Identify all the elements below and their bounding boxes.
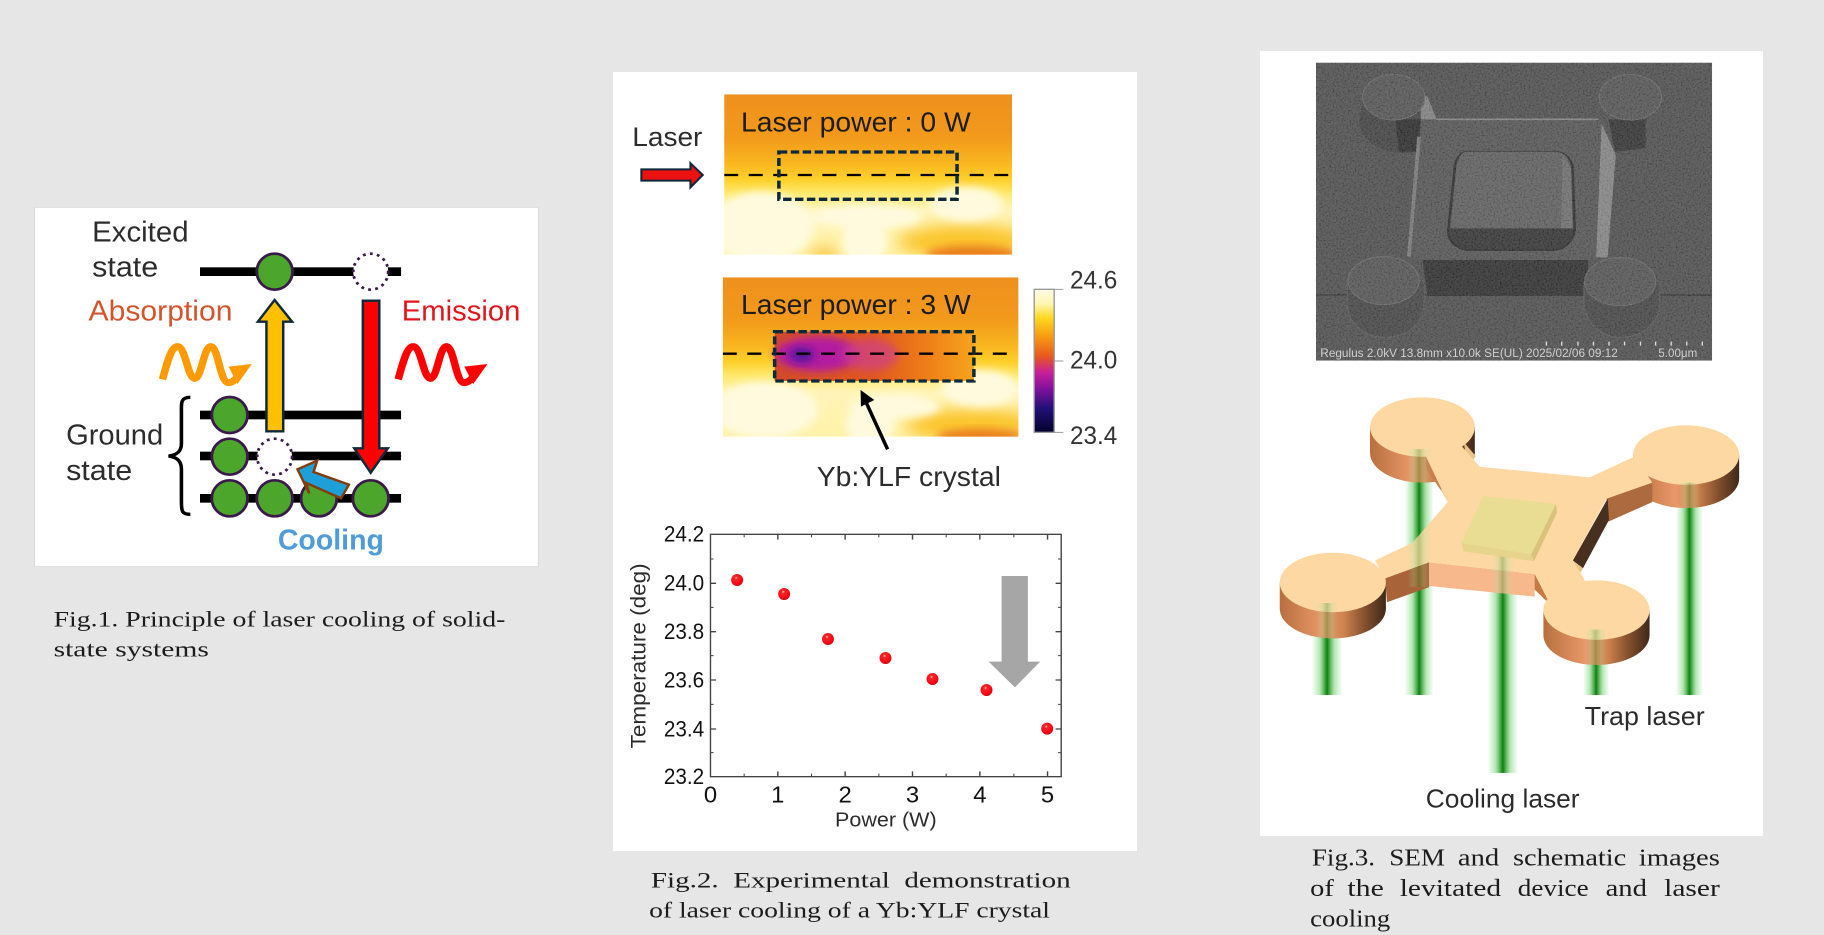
y axis tick labels: 24.2 — [664, 522, 704, 547]
Fig.3 caption: the — [1347, 876, 1384, 902]
emitted photon wave — [398, 347, 487, 384]
central block — [1448, 152, 1575, 250]
frame underside — [1422, 260, 1588, 296]
Fig.3 caption: and — [1458, 845, 1499, 872]
cold spot — [775, 332, 974, 381]
x axis tick labels: 4 — [973, 782, 987, 808]
power label: Laser power : 3 W — [741, 290, 971, 320]
surface noise — [1316, 63, 1712, 361]
ground state label: Ground — [66, 419, 163, 451]
x axis tick labels: 5 — [1041, 782, 1054, 808]
Fig.3 caption: cooling — [1310, 906, 1391, 933]
chart axes — [710, 534, 1061, 777]
frame — [1420, 120, 1422, 153]
Fig.1 caption: state systems — [54, 637, 209, 662]
y axis tick labels: 24.0 — [664, 571, 704, 596]
cooling crystal block — [1461, 496, 1557, 561]
emission label: Emission — [402, 296, 520, 327]
data points — [731, 574, 1053, 735]
bottom-right pad — [1584, 258, 1660, 337]
Fig.3 caption: and — [1606, 876, 1647, 902]
excited state label: state — [92, 252, 158, 283]
Fig.3 caption: of — [1310, 876, 1334, 902]
Fig.3 caption: Fig.3. — [1312, 845, 1375, 872]
bottom-left pad — [1347, 257, 1424, 337]
crystal outline — [779, 152, 957, 199]
crystal outline — [775, 332, 974, 381]
x axis tick labels: 3 — [906, 782, 919, 808]
SEM metadata — [1321, 348, 1696, 360]
Fig.1 caption: Fig.1. Principle of laser cooling of solid- — [54, 607, 505, 632]
emission arrow — [354, 301, 388, 473]
panel: Fig.2 scatter chart — [627, 522, 1071, 923]
Fig.3 caption: SEM — [1389, 845, 1445, 872]
scan line — [722, 352, 1007, 355]
Fig.2 caption: of laser cooling of a Yb:YLF crystal — [649, 898, 1050, 923]
trend arrow — [989, 576, 1040, 687]
device side walls — [1280, 427, 1739, 665]
SEM metadata: Regulus 2.0kV 13.8mm x10.0k SE(UL) 2025/02/06 09:12 — [1320, 346, 1618, 360]
frame lit side — [1596, 123, 1616, 257]
y axis tick labels: 23.2 — [664, 765, 704, 789]
Fig.3 caption: levitated — [1400, 876, 1501, 902]
laser label: Laser — [632, 122, 702, 152]
Fig.3 caption: laser — [1664, 876, 1720, 902]
colour bar — [1034, 265, 1117, 450]
x axis tick labels: 1 — [771, 782, 784, 808]
ground state brace — [169, 397, 190, 514]
panel background — [35, 207, 538, 567]
y axis title: Temperature (deg) — [627, 563, 651, 748]
power label: Laser power : 0 W — [741, 107, 971, 137]
cooling arrow — [297, 461, 349, 498]
absorbed photon wave — [162, 347, 252, 384]
energy level lines — [200, 267, 401, 503]
scan line — [724, 174, 1008, 176]
excited state label: Excited — [92, 217, 189, 248]
ground state label — [66, 419, 163, 487]
panel: Fig.2 background — [613, 72, 1137, 851]
device top surface — [1280, 397, 1739, 640]
Fig.2 caption: Fig.2. Experimental demonstration — [651, 868, 1071, 893]
laser arrow — [641, 163, 703, 187]
Fig.2 caption — [649, 868, 1071, 923]
panel: Fig.3 background — [1260, 51, 1763, 836]
image: levitated device schematic — [1280, 397, 1739, 933]
trap and cooling laser beams — [1312, 479, 1703, 773]
colour bar: 24.0 — [1070, 345, 1117, 374]
thermal image: 0 W — [724, 94, 1012, 255]
colour bar: 23.4 — [1070, 421, 1117, 450]
trap laser label: Trap laser — [1585, 703, 1705, 731]
cooling label: Cooling — [278, 524, 384, 556]
panel: Fig.2 thermal images — [632, 94, 1117, 492]
x axis tick labels: 0 — [704, 782, 717, 808]
beam glow through device — [1316, 449, 1700, 665]
absorption arrow — [258, 300, 292, 431]
y axis tick labels — [664, 522, 704, 789]
crystal pointer arrow — [861, 390, 888, 449]
Fig.3 caption: images — [1639, 845, 1720, 872]
x axis tick labels: 2 — [839, 782, 852, 808]
y axis tick labels: 23.4 — [664, 717, 704, 741]
Fig.3 caption: device — [1518, 876, 1589, 902]
top-left pad — [1359, 75, 1437, 153]
colour bar: 24.6 — [1070, 265, 1117, 294]
SEM metadata: 5.00μm — [1658, 346, 1697, 360]
electrons — [212, 254, 389, 516]
y axis tick labels: 23.8 — [664, 620, 704, 644]
ground state label: state — [66, 455, 132, 487]
empty states — [257, 254, 388, 475]
x axis tick labels — [704, 782, 1054, 808]
x axis title: Power (W) — [835, 809, 937, 832]
Fig.1 caption — [54, 607, 505, 662]
crystal label: Yb:YLF crystal — [817, 462, 1001, 492]
image: SEM micrograph — [1316, 63, 1712, 361]
absorption label: Absorption — [89, 296, 232, 327]
scale bar — [1546, 342, 1702, 346]
Fig.3 caption: schematic — [1513, 845, 1626, 872]
thermal image: 3 W — [722, 277, 1018, 437]
panel: Fig.1 laser cooling principle — [35, 207, 538, 662]
cooling laser label: Cooling laser — [1426, 785, 1580, 814]
top-right pad — [1598, 74, 1662, 152]
y axis tick labels: 23.6 — [664, 668, 704, 692]
Fig.3 caption — [1310, 845, 1720, 933]
excited state label — [92, 217, 189, 283]
